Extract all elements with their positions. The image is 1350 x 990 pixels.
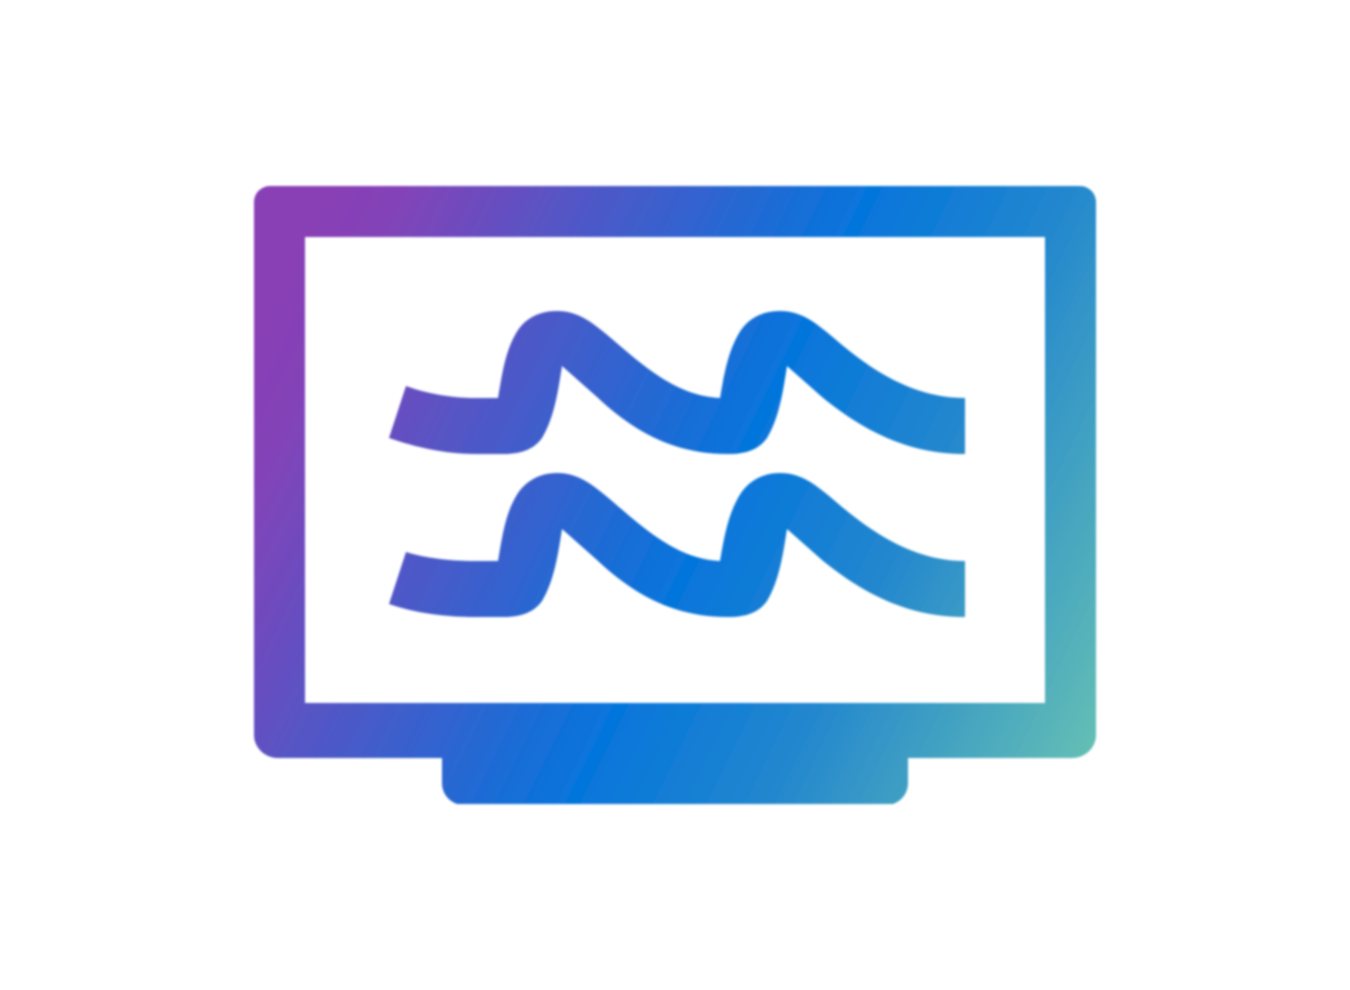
upper wave	[389, 311, 965, 454]
monitor body	[254, 186, 1096, 804]
lower wave	[389, 473, 965, 617]
monitor frame and stand	[254, 186, 1096, 804]
